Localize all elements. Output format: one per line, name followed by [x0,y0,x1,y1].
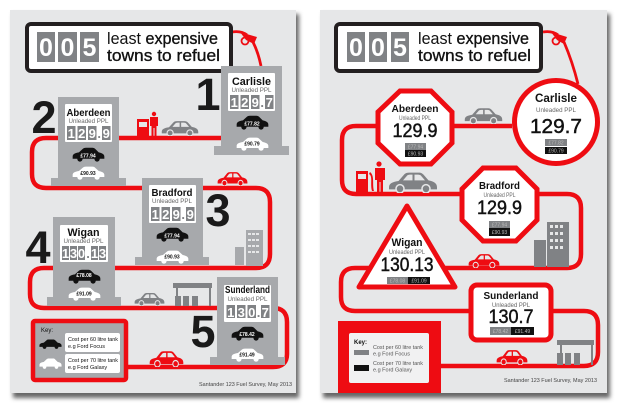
pump: Aberdeen: . [97,126,101,141]
pump: Aberdeen: Unleaded PPL [68,119,109,125]
key: Cost per 60 litre tank [68,337,118,343]
title text: towns to refuel [107,46,220,65]
sign: Carlisle: Unleaded PPL [536,108,577,114]
sign: Aberdeen: Unleaded PPL [399,116,432,122]
icon: grey car [162,121,198,136]
counter 005: 0 [61,34,74,62]
pump: Sunderland: Unleaded PPL [228,297,268,303]
pump: Wigan: 3 [70,246,77,261]
pump: Bradford: £77.94 [164,234,180,240]
key: e.g Ford Focus [373,352,410,358]
sign: Sunderland: £91.49 [515,329,530,335]
icon: buildings [534,222,569,267]
pipeline [30,138,287,367]
counter 005: 0 [371,34,385,62]
pump: Carlisle: 2 [241,95,248,110]
sign: Sunderland: Sunderland [484,290,538,302]
sign: Bradford: Unleaded PPL [484,193,516,199]
number 2: 2 [31,92,57,143]
key [338,321,441,393]
pump: Wigan: . [86,246,90,261]
sign: Wigan: Unleaded PPL [389,250,426,256]
sign: Sunderland: Unleaded PPL [492,303,531,309]
sign: Aberdeen: £90.93 [408,152,423,158]
source: Santander 123 Fuel Survey, May 2013 [199,382,292,388]
pump: Bradford: 9 [187,207,194,222]
pump: Wigan: Wigan [68,227,100,239]
pump: Wigan: Unleaded PPL [64,239,104,245]
pump: Aberdeen: £90.93 [80,171,96,177]
pump: Aberdeen: 9 [103,126,110,141]
icon: red car bottom [150,351,183,367]
pump: Sunderland: £91.49 [239,352,255,358]
sign: Carlisle: £77.82 [548,140,564,146]
sign: Sunderland [471,285,551,340]
sign: Bradford: 129.9 [477,198,522,219]
pump: Bradford: £90.93 [164,254,180,260]
sign: Carlisle: Carlisle [535,91,577,105]
counter 005: 0 [39,34,53,62]
nozzle hose [543,32,578,84]
key: Key: [41,328,53,334]
number 5: 5 [190,306,216,357]
pump: Wigan [47,217,121,306]
pump: Bradford [135,178,209,265]
icon: fuel pump and attendant [356,161,385,193]
source: Santander 123 Fuel Survey, May 2013 [504,378,597,384]
pump: Sunderland: 7 [262,305,269,320]
key: Cost per 60 litre tank [373,345,423,351]
pump: Sunderland: . [257,305,260,320]
pump: Bradford: Unleaded PPL [152,199,193,205]
pump: Carlisle [214,66,289,155]
counter 005: 0 [349,34,363,62]
pipeline [341,126,598,366]
panel: pump version [10,10,299,398]
sign: Wigan: 130.13 [380,255,434,276]
pump: Bradford: Bradford [152,188,192,199]
panel: road sign version [320,10,610,398]
key: e.g Ford Galaxy [373,368,412,374]
title box [27,24,231,71]
title box [336,24,541,71]
pump: Carlisle: 7 [266,95,273,110]
pump: Wigan: £91.09 [76,292,92,298]
sign: Wigan [359,206,455,287]
counter 005 [37,32,99,62]
number 4: 4 [25,222,51,273]
pump: Carlisle: Carlisle [232,76,271,88]
sign: Sunderland: 130.7 [488,307,534,328]
key: Cost per 70 litre tank [68,358,118,364]
sign: Bradford: £77.94 [492,222,507,228]
pump: Carlisle: Unleaded PPL [232,88,272,94]
pump: Wigan: 1 [91,246,98,261]
counter 005 [347,32,409,62]
sign: Wigan: £91.09 [411,278,427,284]
pump: Wigan: 3 [99,246,106,261]
key [33,321,126,380]
title text: towns to refuel [418,46,531,65]
sign: Aberdeen: 129.9 [392,121,438,142]
pump: Bradford: 1 [152,207,159,222]
pump: Wigan: £78.08 [76,273,92,279]
pump: Bradford: 2 [162,207,169,222]
key: e.g Ford Focus [68,344,105,350]
pump: Carlisle: . [260,95,264,110]
sign: Aberdeen: Aberdeen [392,104,438,115]
pump: Wigan: 1 [62,246,69,261]
pump: Carlisle: £90.79 [244,142,260,148]
pump: Sunderland: 0 [248,305,255,320]
pump: Aberdeen: 9 [89,126,96,141]
key: e.g Ford Galaxy [68,365,107,371]
title text: least expensive [418,29,529,48]
sign: Wigan: Wigan [392,237,423,249]
pump: Aberdeen: 1 [68,126,75,141]
icon: red car lower [497,350,527,365]
pump: Wigan: 0 [78,246,85,261]
counter 005: 5 [393,34,407,62]
pump: Aberdeen [51,97,126,186]
counter 005: 5 [83,34,97,62]
number 1: 1 [195,69,221,120]
sign: Sunderland: £78.42 [493,329,508,335]
icon: buildings [235,230,263,266]
pump: Sunderland: 1 [227,305,234,320]
nozzle hose [232,32,261,66]
key: Cost per 70 litre tank [373,361,423,367]
icon: large grey car [389,173,437,193]
sign: Carlisle: 129.7 [530,116,582,138]
sign: Bradford: £90.93 [492,230,507,236]
pump: Carlisle: 1 [231,95,238,110]
icon: red car [218,172,247,186]
title text: least expensive [107,29,218,48]
icon: petrol station [557,340,594,365]
pump: Aberdeen: Aberdeen [66,108,110,119]
pump: Sunderland [210,277,285,365]
pump: Aberdeen: £77.94 [80,154,96,160]
icon: grey car upper [465,108,502,124]
key: Key: [354,340,367,346]
pump: Sunderland: Sunderland [225,285,270,296]
icon: petrol station [173,283,212,306]
sign: Aberdeen [378,91,452,164]
pump: Bradford: 9 [173,207,180,222]
sign: Carlisle: £90.79 [548,148,564,154]
pump: Bradford: . [181,207,185,222]
pump: Aberdeen: 2 [78,126,85,141]
pump: Carlisle: 9 [252,95,259,110]
sign: Wigan: £78.08 [390,278,405,284]
sign: Aberdeen: £77.94 [408,144,423,150]
sign: Bradford [462,168,537,241]
sign: Bradford: Bradford [479,181,520,192]
title text [107,29,220,65]
sign: Carlisle [514,80,598,164]
icon: fuel pump and attendant [137,112,158,137]
icon: red car upper [469,254,499,268]
pump: Carlisle: £77.82 [244,122,260,128]
number 3: 3 [205,185,231,236]
pump: Sunderland: 3 [238,305,245,320]
icon: grey car lower [135,293,164,306]
pump: Sunderland: £78.42 [239,332,255,338]
title text [418,29,531,65]
